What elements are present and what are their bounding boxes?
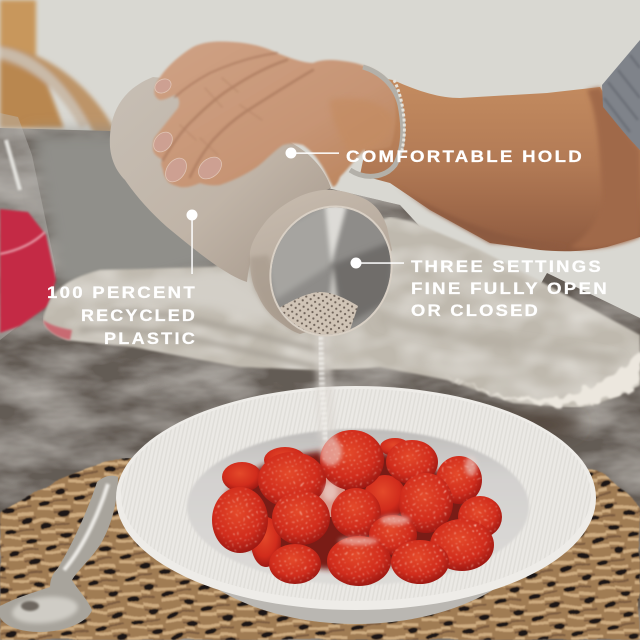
grey knit sleeve (602, 40, 640, 150)
glass of red drink (0, 113, 56, 340)
fingernails (150, 76, 226, 186)
hand (150, 42, 396, 187)
metal sieve plate (271, 208, 391, 334)
shaker cap (250, 190, 392, 336)
callout: three settings: FINE FULLY OPEN (411, 280, 609, 298)
silver bracelet (350, 67, 404, 176)
shadow between berries (223, 450, 467, 570)
bowl inner well (187, 429, 529, 585)
seeds (214, 432, 500, 584)
bowl (116, 386, 596, 624)
front berries (212, 430, 502, 586)
bowl underside (166, 402, 546, 624)
finger creases (163, 53, 313, 177)
background wall (0, 0, 640, 340)
perforated opening (280, 292, 358, 334)
sugar dusting (320, 438, 477, 545)
marble table (0, 128, 640, 640)
strawberries (212, 430, 502, 586)
falling sugar stream (314, 328, 336, 442)
callout: 100 percent recycled plastic: RECYCLED (81, 307, 197, 325)
callout: 100 percent recycled plastic: 100 PERCENT (47, 284, 197, 302)
callout: three settings (350, 258, 609, 320)
knuckle and wrist shading (330, 98, 394, 155)
cap rim (248, 185, 414, 357)
callout: three settings: THREE SETTINGS (411, 258, 603, 276)
callout: 100 percent recycled plastic: PLASTIC (104, 330, 197, 348)
arm (360, 78, 640, 251)
callout: three settings: OR CLOSED (411, 302, 540, 320)
back berries (222, 438, 410, 567)
callout: comfortable hold: COMFORTABLE HOLD (346, 148, 584, 166)
spoon (0, 476, 118, 632)
callout: comfortable hold (286, 148, 584, 166)
shaker body (110, 77, 331, 282)
towel fringe (440, 350, 640, 405)
wooden chair (0, 0, 116, 136)
bowl rim (116, 386, 596, 610)
folded linen towel (43, 217, 640, 407)
woven rattan placemat (0, 458, 640, 640)
callout: 100 percent recycled plastic (47, 210, 198, 348)
